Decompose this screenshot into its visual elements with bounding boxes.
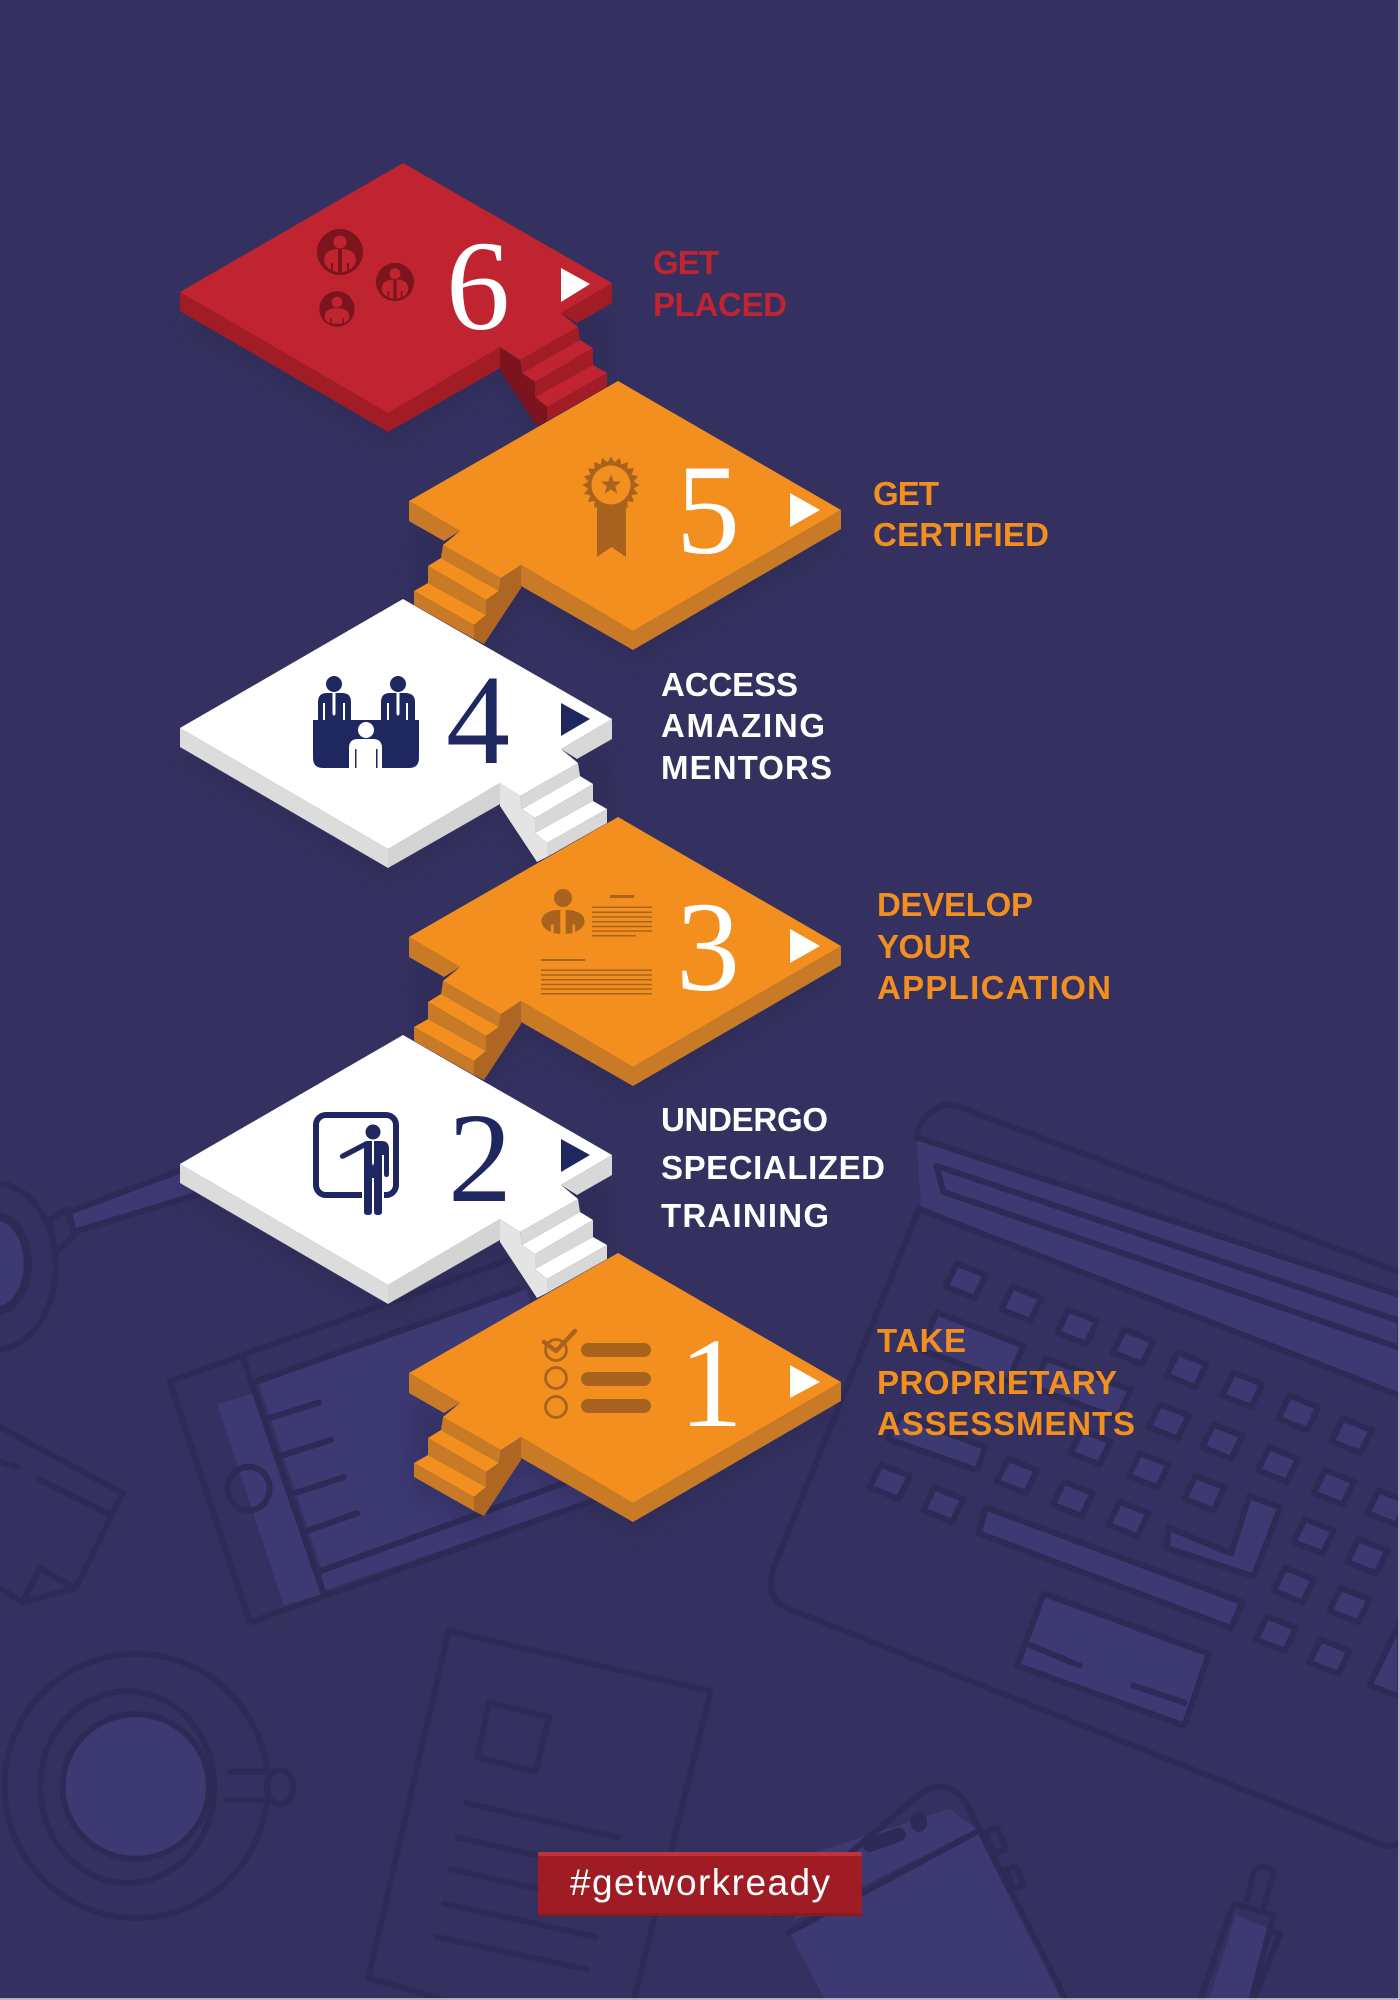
arrow — [790, 1365, 820, 1398]
label: get placed: GET — [653, 244, 719, 281]
number 6: 6 — [446, 215, 510, 357]
icon: trainer at a board — [316, 1115, 396, 1215]
number 5: 5 — [676, 439, 740, 581]
phone — [776, 1787, 1066, 2000]
number 4: 4 — [446, 649, 510, 791]
platform 2 with stairs — [180, 1035, 612, 1318]
label: take proprietary assessments — [877, 1322, 1135, 1442]
tablet — [170, 1255, 598, 1622]
step 2: undergo specialized training — [180, 1035, 885, 1318]
platform 4 with stairs — [180, 599, 612, 882]
pen — [1200, 1866, 1280, 2000]
hashtag button: #getworkready — [570, 1862, 830, 1903]
platform 3 with stairs — [409, 817, 841, 1100]
step 3: develop your application — [409, 817, 1111, 1100]
hashtag button — [538, 1852, 862, 1916]
label: develop your application: YOUR — [877, 928, 971, 965]
platform 6 with stairs — [180, 163, 612, 446]
label: take proprietary assessments: ASSESSMENTS — [877, 1405, 1135, 1442]
label: take proprietary assessments: PROPRIETARY — [877, 1364, 1117, 1401]
arrow — [561, 268, 590, 302]
label: develop your application: DEVELOP — [877, 886, 1033, 923]
background illustration: desk objects — [0, 1105, 1400, 2000]
sticky document — [0, 1427, 123, 1602]
number 3: 3 — [676, 876, 740, 1018]
number 2: 2 — [448, 1087, 512, 1229]
label: develop your application — [877, 886, 1111, 1006]
label: get certified: GET — [873, 475, 939, 512]
number 1: 1 — [679, 1312, 743, 1454]
arrow — [561, 703, 590, 736]
label: get certified — [873, 475, 1049, 553]
label: undergo specialized training: UNDERGO — [661, 1101, 828, 1138]
label: access amazing mentors — [661, 666, 832, 786]
paper sheet — [368, 1631, 711, 2000]
icon: people in circles — [317, 229, 414, 327]
icon: mentors at a desk — [313, 676, 419, 768]
arrow — [790, 929, 820, 963]
label: undergo specialized training: TRAINING — [661, 1197, 829, 1234]
label: take proprietary assessments: TAKE — [877, 1322, 966, 1359]
platform 5 with stairs — [409, 381, 841, 664]
step 5: get certified — [409, 381, 1049, 664]
label: develop your application: APPLICATION — [877, 969, 1111, 1006]
icon: resume document — [541, 889, 652, 994]
label: undergo specialized training — [661, 1101, 885, 1234]
icon: checklist — [544, 1331, 651, 1418]
label: access amazing mentors: ACCESS — [661, 666, 798, 703]
arrow — [561, 1139, 590, 1172]
label: access amazing mentors: MENTORS — [661, 749, 832, 786]
label: access amazing mentors: AMAZING — [661, 707, 825, 744]
icon: award ribbon — [582, 456, 640, 557]
platform 1 with stairs — [409, 1253, 841, 1536]
step 6: get placed — [180, 163, 787, 446]
laptop — [771, 1105, 1400, 1846]
label: get placed — [653, 244, 787, 323]
step 4: access amazing mentors — [180, 599, 832, 882]
label: get placed: PLACED — [653, 286, 787, 323]
magnifying glass — [0, 1166, 196, 1350]
step 1: take proprietary assessments — [409, 1253, 1135, 1536]
label: undergo specialized training: SPECIALIZED — [661, 1149, 885, 1186]
coffee cup — [4, 1654, 293, 1918]
arrow — [790, 493, 820, 527]
label: get certified: CERTIFIED — [873, 516, 1049, 553]
